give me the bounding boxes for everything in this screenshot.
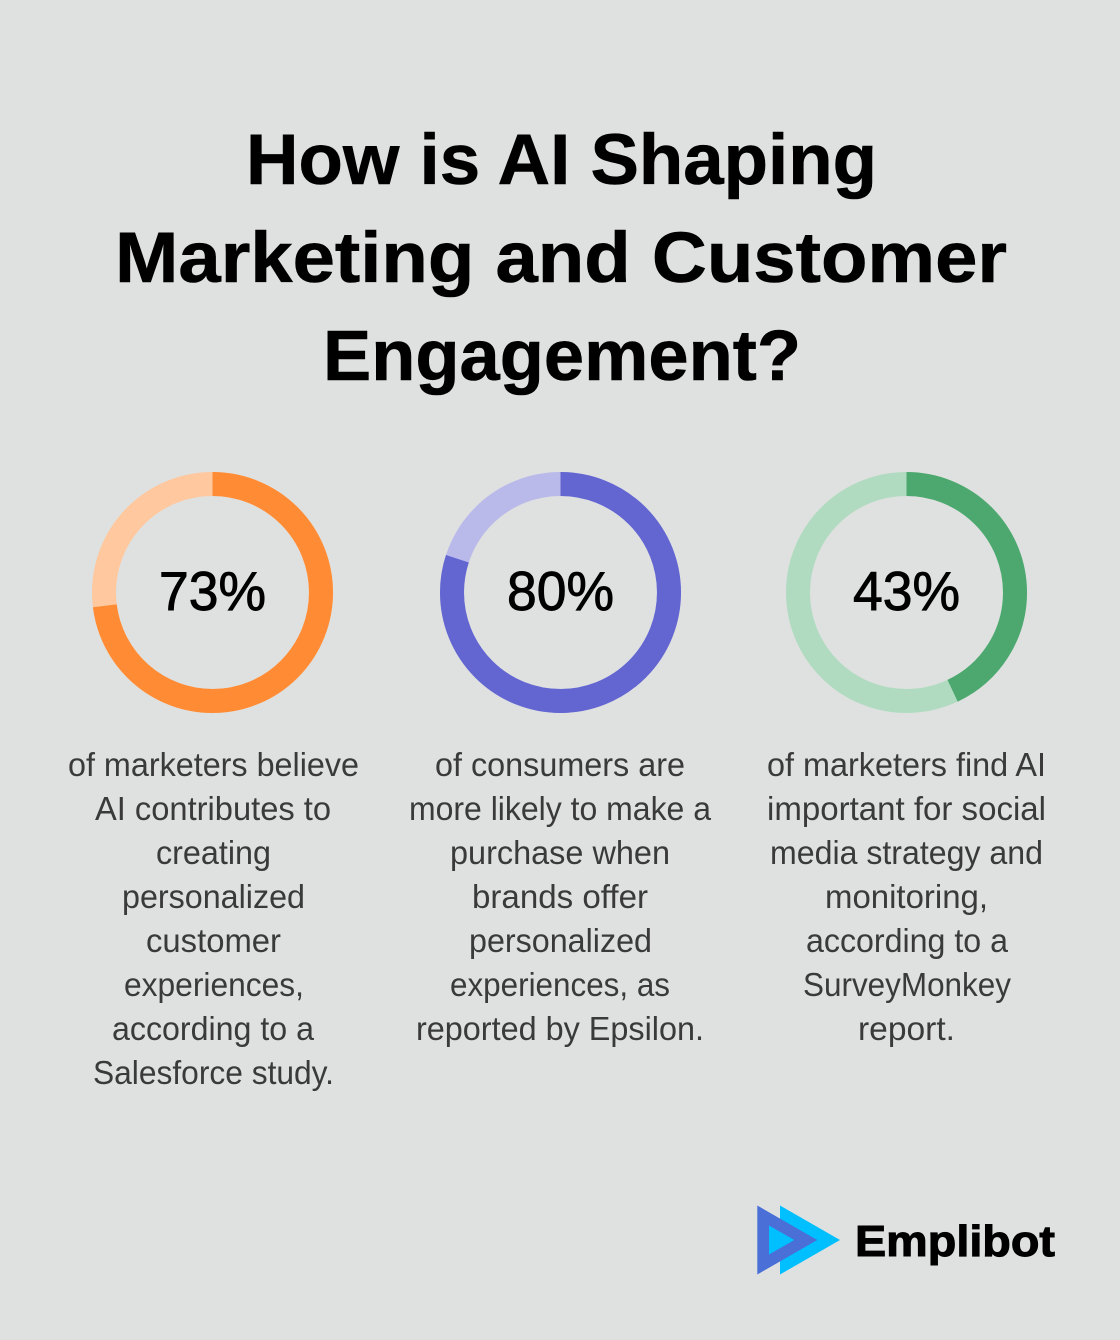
text: social media description: media strategy and (770, 834, 1043, 871)
text: marketers description: Salesforce study. (93, 1054, 334, 1091)
text: consumers description (409, 746, 712, 1047)
text: marketers description: customer (146, 922, 281, 959)
title: How is AI Shaping (246, 121, 877, 200)
title (115, 121, 1007, 396)
text: consumers description: of consumers are (435, 746, 685, 783)
panel: 43% marketers stat (767, 484, 1046, 1047)
value: 80%: 80% (507, 560, 614, 622)
icon: play triangles (757, 1206, 840, 1274)
text: marketers description: personalized (122, 878, 305, 915)
text: marketers description (68, 746, 359, 1091)
text: social media description (767, 746, 1046, 1047)
text: marketers description: according to a (112, 1010, 315, 1047)
text: consumers description: purchase when (450, 834, 670, 871)
text: social media description: according to a (806, 922, 1009, 959)
text: consumers description: personalized (469, 922, 652, 959)
text: marketers description: of marketers believe (68, 746, 359, 783)
text: marketers description: creating (156, 834, 271, 871)
value: 73%: 73% (159, 560, 266, 622)
donut chart: 43% (798, 484, 1015, 701)
text: consumers description: experiences, as (450, 966, 670, 1003)
text: consumers description: reported by Epsilon. (416, 1010, 704, 1047)
donut chart: 73% (104, 484, 321, 701)
logo: Emplibot (757, 1206, 1055, 1274)
title: Marketing and Customer (115, 219, 1007, 298)
text: social media description: report. (858, 1010, 955, 1047)
text: marketers description: AI contributes to (95, 790, 331, 827)
donut chart: 80% (452, 484, 669, 701)
text: consumers description: more likely to make a (409, 790, 712, 827)
panel: 73% marketers stat (68, 484, 359, 1091)
wordmark: Emplibot (855, 1217, 1055, 1266)
text: social media description: monitoring, (825, 878, 988, 915)
text: social media description: important for social (767, 790, 1046, 827)
panel: 80% consumers stat (409, 484, 712, 1047)
value: 43%: 43% (853, 560, 960, 622)
title: Engagement? (323, 317, 801, 396)
text: social media description: of marketers find AI (767, 746, 1046, 783)
text: marketers description: experiences, (124, 966, 304, 1003)
text: consumers description: brands offer (472, 878, 648, 915)
text: social media description: SurveyMonkey (803, 966, 1011, 1003)
